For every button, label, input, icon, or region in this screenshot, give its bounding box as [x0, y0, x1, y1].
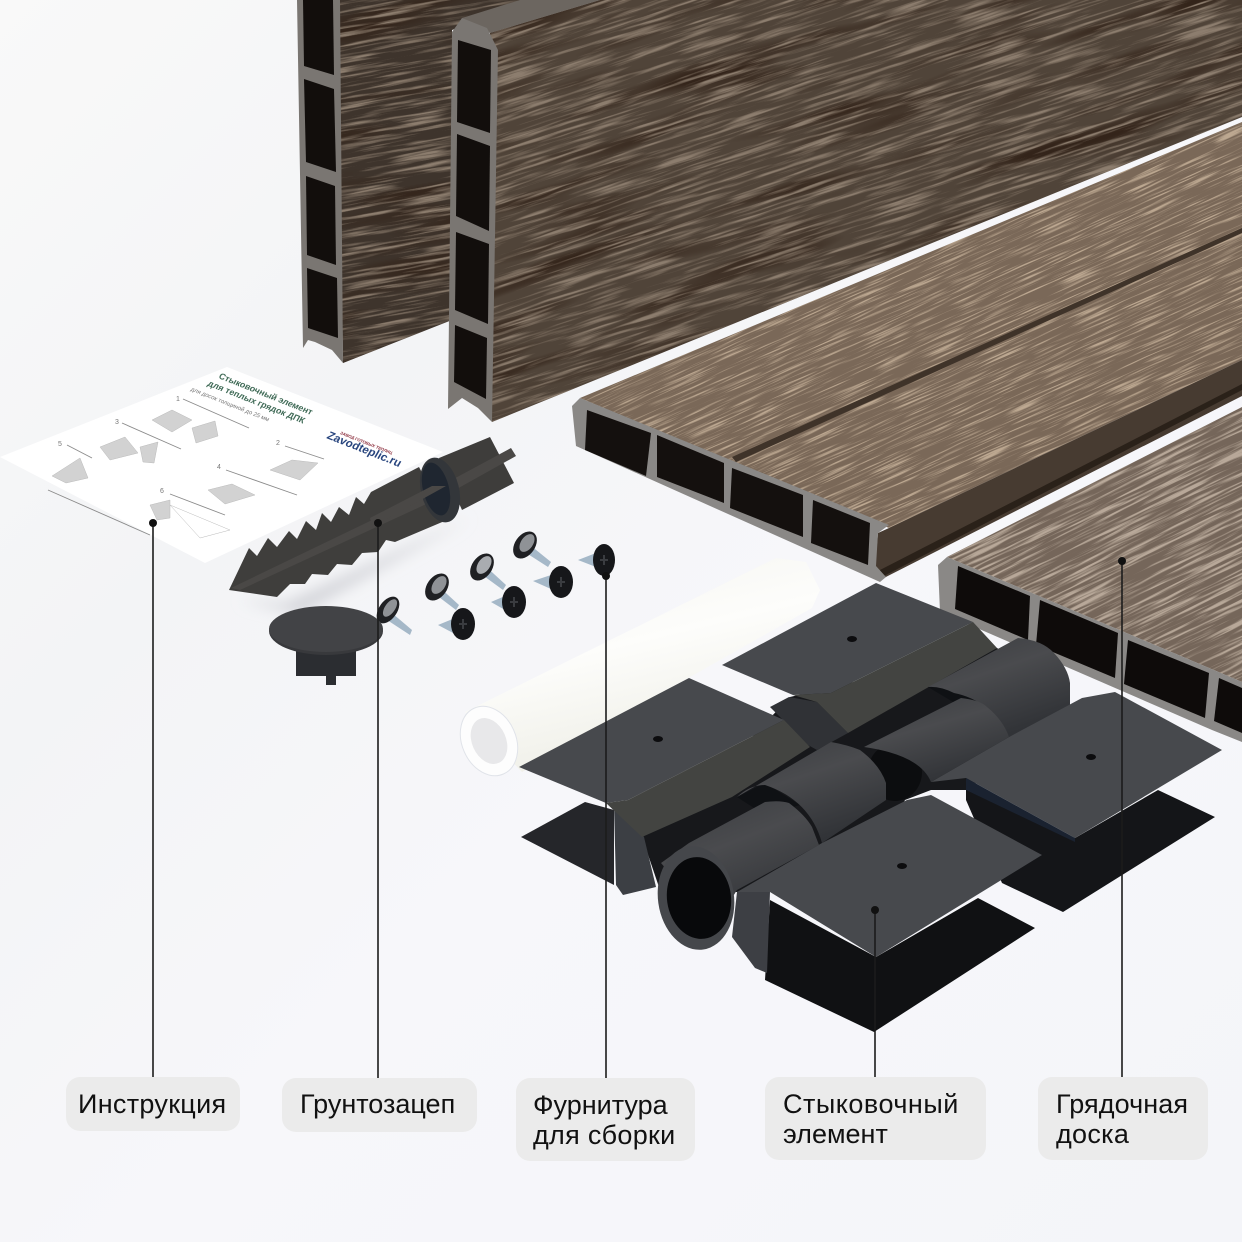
back cylinder [928, 638, 1070, 737]
left lower plate [521, 802, 614, 885]
instruction sheet: 4 [217, 464, 221, 471]
instruction sheet: 5 [58, 441, 62, 448]
label pill: Грунтозацеп [300, 1089, 455, 1119]
white pipe [450, 558, 820, 785]
anchor spine rib [231, 448, 516, 590]
back stem [770, 697, 848, 750]
label pill [1038, 1077, 1208, 1160]
screw 8 [578, 544, 615, 576]
sheet heading: Стыковочный элемент [217, 371, 315, 417]
front wall [732, 892, 770, 973]
ground anchor [229, 437, 516, 615]
anchor serrated body [229, 467, 447, 597]
label pill [282, 1078, 477, 1132]
screw 1 [372, 593, 412, 635]
flat board [572, 122, 1242, 582]
back cylinder hole [928, 676, 990, 715]
board top surface [947, 407, 1242, 682]
board top edge [462, 0, 600, 33]
left cylinder [737, 742, 886, 843]
board end face [297, 0, 343, 363]
instruction sheet: 6 [160, 488, 164, 495]
screw 2 [420, 569, 459, 610]
label pill: для сборки [533, 1120, 676, 1150]
front tube [661, 801, 819, 925]
label pill: доска [1056, 1119, 1130, 1149]
docking element [519, 583, 1222, 1032]
board end face [448, 18, 498, 422]
pipe end [450, 697, 528, 785]
right plate [931, 692, 1222, 838]
front plate [737, 795, 1042, 957]
middle cylinder [864, 698, 1009, 782]
sheet logo: Zavodteplic.ru [325, 430, 404, 470]
instruction sheet: 3 [115, 419, 119, 426]
label pill: Грядочная [1056, 1089, 1188, 1119]
pipe body [465, 558, 820, 772]
board end face [572, 398, 889, 582]
left plate slope [606, 720, 810, 837]
callout: assembly hardware [516, 572, 695, 1161]
board end face [938, 557, 1242, 742]
label pill [765, 1077, 986, 1160]
sheet heading: для досок толщиной до 25 мм [189, 386, 271, 423]
cap [269, 606, 383, 685]
sheet heading: для теплых грядок ДПК [206, 378, 308, 426]
label pill: Фурнитура [533, 1090, 669, 1120]
screw 7 [533, 566, 573, 598]
sheet step diagrams [52, 410, 318, 538]
instruction sheet [0, 364, 443, 563]
sheet paper [0, 367, 443, 563]
board top surface [580, 122, 1242, 528]
front bottom plate [765, 898, 1035, 1032]
cap stem [296, 650, 356, 685]
leader line [149, 519, 157, 1077]
front tube ring [651, 841, 741, 955]
label pill: Стыковочный [783, 1089, 959, 1119]
base silhouette filling the gaps [642, 648, 1070, 892]
screws [372, 527, 615, 640]
screw 6 [491, 586, 526, 618]
right lower plate [966, 787, 1215, 912]
sheet step numbers and rules [48, 399, 324, 535]
board face [340, 0, 520, 363]
mounting holes [847, 636, 857, 642]
sheet logo: ЗАВОД ГОТОВЫХ ТЕПЛИЦ [339, 430, 394, 456]
anchor shadow [240, 518, 470, 615]
right lip [966, 778, 1075, 842]
anchor head fins [439, 437, 514, 510]
left plate flat [519, 678, 784, 803]
label pill: Инструкция [78, 1089, 226, 1119]
anchor disc collar [414, 453, 466, 527]
cap disc [269, 607, 383, 655]
screw 3 [465, 549, 506, 590]
screw 4 [508, 527, 551, 567]
screw 5 [438, 608, 475, 640]
instruction sheet: 1 [176, 396, 180, 403]
callout: instruction [66, 519, 240, 1131]
callout: ground anchor [282, 519, 477, 1132]
callout: docking element [765, 906, 986, 1160]
board side [875, 360, 1242, 580]
leader line [1118, 557, 1126, 1077]
label pill: элемент [783, 1119, 888, 1149]
leader line [602, 572, 610, 1078]
instruction sheet: 2 [276, 440, 280, 447]
back plate flat [722, 583, 973, 695]
leader line [871, 906, 879, 1077]
callout: bed board [1038, 557, 1208, 1160]
left wall [614, 805, 656, 895]
back plate slope [793, 622, 997, 733]
back board, standing [297, 0, 520, 363]
left cylinder hole [737, 783, 800, 815]
label pill [66, 1077, 240, 1131]
front board, standing [448, 0, 1242, 422]
leader line [374, 519, 382, 1078]
front-right board [938, 407, 1242, 742]
label pill [516, 1078, 695, 1161]
middle cylinder hole [868, 743, 922, 801]
board face [490, 0, 1242, 422]
sheet heading [189, 364, 315, 436]
